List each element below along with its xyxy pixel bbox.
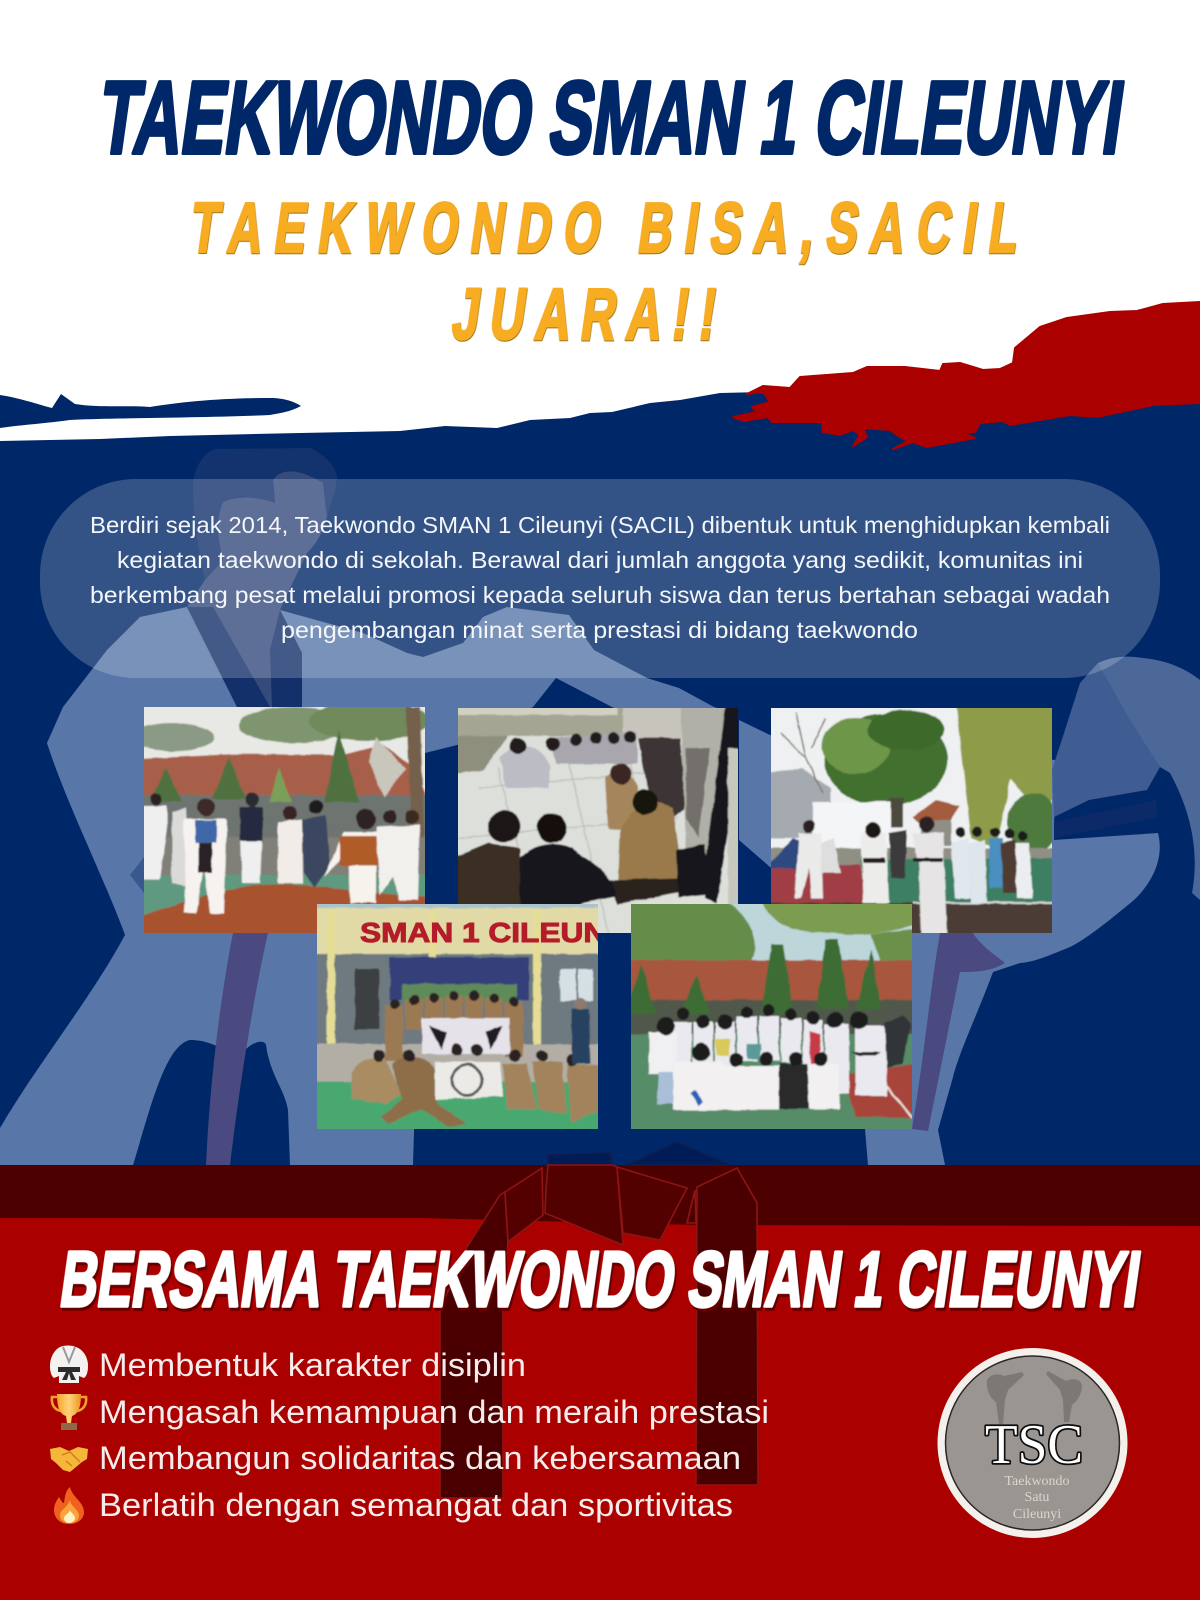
belt right fold [617,1167,687,1240]
photo 2: indoor group meeting [458,708,738,933]
paragraph: history text: pengembangan minat serta prestasi di bidang taekwondo [281,617,918,643]
text: kebersamaan: Membangun solidaritas dan kebersamaan [99,1440,741,1476]
right fighter belt [912,933,1005,1131]
navy main background [0,392,1200,1200]
right fighter body [739,720,1160,1165]
paragraph: history text: Berdiri sejak 2014, Taekwondo SMAN 1 Cileunyi (SACIL) dibentuk untuk menghidupkan kembali [90,512,1110,538]
logo text: full name [1004,1474,1070,1522]
left fighter face and neck [187,471,327,707]
panel: description pill [40,479,1160,678]
logo text: full name: Cileunyi [1013,1507,1061,1522]
red lower background [0,1165,1200,1600]
right fighter hair [1098,657,1200,900]
photo 3: outdoor training [771,708,1052,933]
benefit list [50,1346,769,1524]
belt center link [687,1190,696,1223]
text: sportivitas: Berlatih dengan semangat dan sportivitas [99,1487,733,1523]
left fighter lapel [187,607,302,707]
silhouette: fighters background [0,448,1200,1165]
left fighter hand shadow [130,857,144,893]
photo 5: group portrait on court [631,904,912,1129]
belt center knot [545,1165,623,1245]
text: disiplin: Membentuk karakter disiplin [99,1347,526,1383]
right fighter face [1052,663,1160,817]
left fighter hair [193,448,337,580]
left fighter belt [206,933,268,1165]
icon: dark belt knot [440,1142,758,1498]
photo 4 sign text: SMAN 1 CILEUNI [360,917,615,948]
paragraph: history text: berkembang pesat melalui promosi kepada seluruh siswa dan terus bertahan sebagai wadah [90,582,1110,608]
logo text: TSC: TSC [985,1414,1083,1476]
icon: flame [54,1487,84,1524]
right fighter band [1054,800,1158,838]
belt top above band [548,1142,730,1165]
photo 1: sparring on the court [144,707,425,933]
icon: gi uniform [50,1346,88,1383]
subtitle line 2: JUARA!! [448,275,722,355]
icon: handshake [50,1447,88,1472]
left fighter body [0,607,727,1165]
belt left fold [505,1168,543,1242]
belt right tail [696,1168,758,1485]
icon: left kicker silhouette [987,1372,1024,1424]
logo text: full name: Taekwondo [1004,1474,1070,1489]
left fighter leg gaps [133,1040,290,1165]
icon: trophy [52,1394,86,1430]
paragraph: history text: kegiatan taekwondo di sekolah. Berawal dari jumlah anggota yang sedikit, komunitas ini [117,547,1083,573]
belt left tail [440,1192,508,1498]
subtitle line 1: TAEKWONDO BISA,SACIL [186,188,1024,267]
paragraph: history text [90,512,1110,643]
logo: TSC badge [938,1348,1128,1538]
text: prestasi: Mengasah kemampuan dan meraih prestasi [99,1394,769,1430]
icon: right kicker silhouette [1046,1371,1082,1422]
brush stroke: red top-right [733,302,1200,449]
dark band: belt strip [0,1165,1200,1226]
logo text: full name: Satu [1025,1490,1049,1505]
brush stroke: navy top-left [0,394,301,428]
photo 4: scout group at school front [317,904,615,1129]
